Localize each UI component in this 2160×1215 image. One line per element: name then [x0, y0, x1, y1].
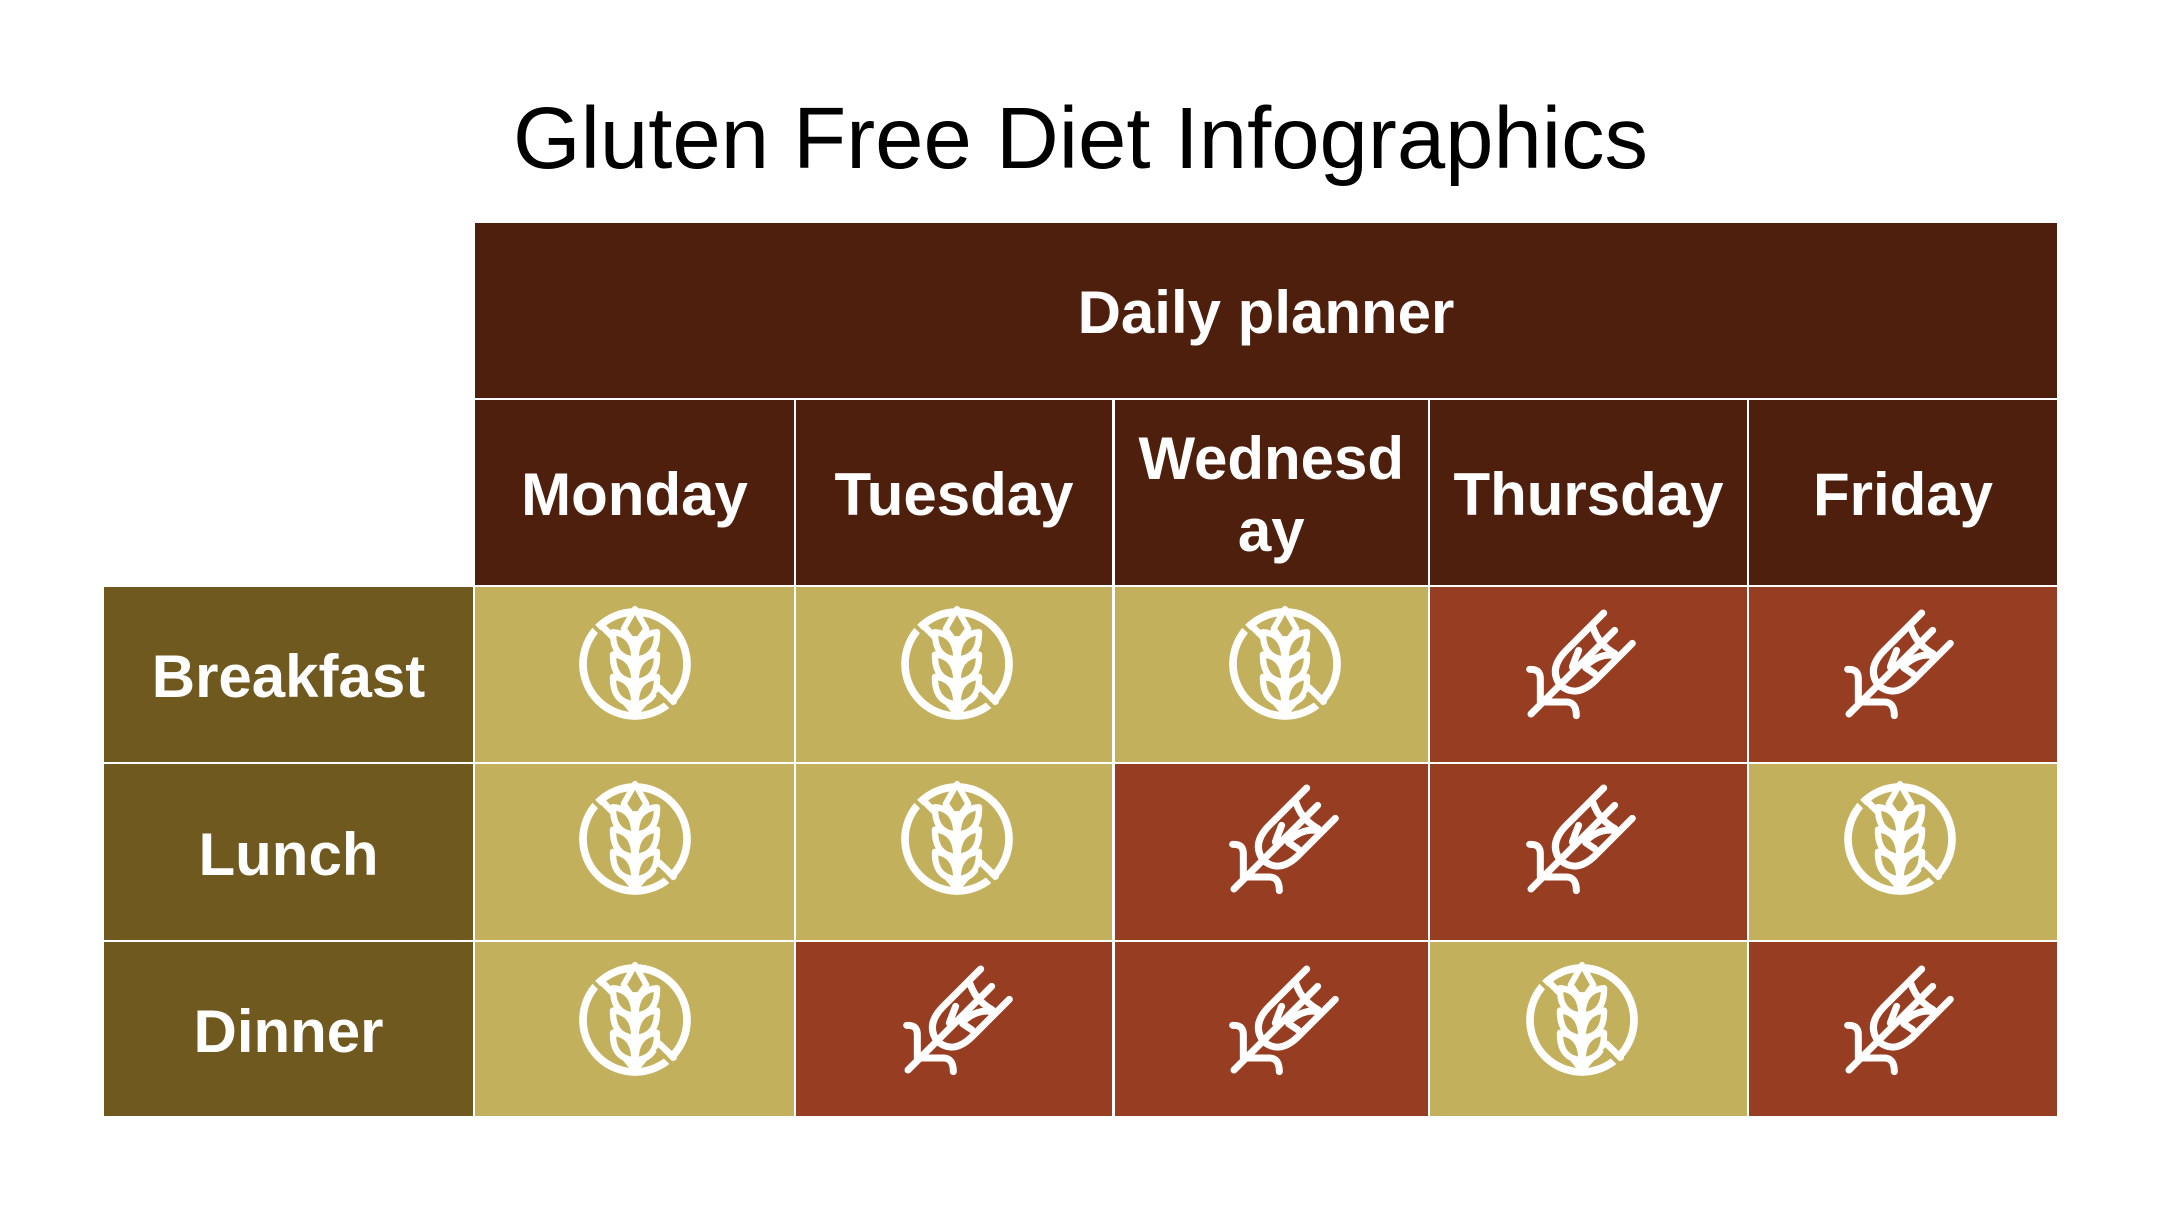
column header: Monday: Monday — [521, 461, 748, 528]
table header: Daily planner — [475, 223, 2057, 398]
icon: wheat, Friday dinner — [1844, 966, 1954, 1076]
icon: no gluten, Tuesday lunch — [901, 780, 1013, 895]
icon: wheat, Wednesday dinner — [1229, 966, 1339, 1076]
column header: Wednesday: Wednesd — [1138, 425, 1404, 492]
title: Gluten Free Diet Infographics — [513, 90, 1648, 187]
icon: no gluten, Monday breakfast — [579, 606, 691, 720]
row header: Lunch: Lunch — [198, 820, 378, 888]
cell: Tuesday lunch gluten free — [796, 764, 1112, 940]
column header: Friday: Friday — [1813, 461, 1993, 528]
table header: Daily planner: Daily planner — [1078, 279, 1454, 346]
column header: Thursday — [1430, 400, 1747, 585]
icon: no gluten, Tuesday breakfast — [901, 606, 1013, 720]
icon: wheat, Thursday lunch — [1526, 784, 1636, 894]
icon: no gluten, Monday lunch — [579, 780, 691, 895]
column header: Tuesday: Tuesday — [834, 461, 1073, 528]
column header: Thursday: Thursday — [1453, 461, 1724, 528]
row header: Dinner: Dinner — [193, 998, 384, 1064]
cell: Friday dinner with gluten — [1749, 942, 2057, 1116]
cell: Thursday lunch with gluten — [1430, 764, 1747, 940]
cell: Monday lunch gluten free — [475, 764, 794, 940]
column header: Wednesday: ay — [1238, 497, 1305, 564]
cell: Friday breakfast with gluten — [1749, 587, 2057, 762]
row header: Dinner — [104, 942, 473, 1116]
icon: no gluten, Friday lunch — [1844, 780, 1956, 895]
cell: Thursday breakfast with gluten — [1430, 587, 1747, 762]
column header: Tuesday — [796, 400, 1112, 585]
row header: Breakfast — [104, 587, 473, 762]
column header: Wednesday — [1114, 400, 1428, 585]
icon: no gluten, Wednesday breakfast — [1229, 606, 1341, 720]
icon: wheat, Thursday breakfast — [1526, 610, 1636, 720]
icon: no gluten, Monday dinner — [579, 962, 691, 1076]
cell: Friday lunch gluten free — [1749, 764, 2057, 940]
icon: wheat, Friday breakfast — [1844, 610, 1954, 720]
cell: Thursday dinner gluten free — [1430, 942, 1747, 1116]
row header: Lunch — [104, 764, 473, 940]
icon: wheat, Tuesday dinner — [903, 966, 1013, 1076]
column header: Monday — [475, 400, 794, 585]
icon: no gluten, Thursday dinner — [1526, 962, 1638, 1076]
row header: Breakfast: Breakfast — [152, 643, 425, 710]
cell: Wednesday lunch with gluten — [1114, 764, 1428, 940]
cell: Tuesday dinner with gluten — [796, 942, 1112, 1116]
cell: Monday breakfast gluten free — [475, 587, 794, 762]
cell: Wednesday dinner with gluten — [1114, 942, 1428, 1116]
cell: Wednesday breakfast gluten free — [1114, 587, 1428, 762]
column header: Friday — [1749, 400, 2057, 585]
icon: wheat, Wednesday lunch — [1229, 784, 1339, 894]
cell: Monday dinner gluten free — [475, 942, 794, 1116]
cell: Tuesday breakfast gluten free — [796, 587, 1112, 762]
